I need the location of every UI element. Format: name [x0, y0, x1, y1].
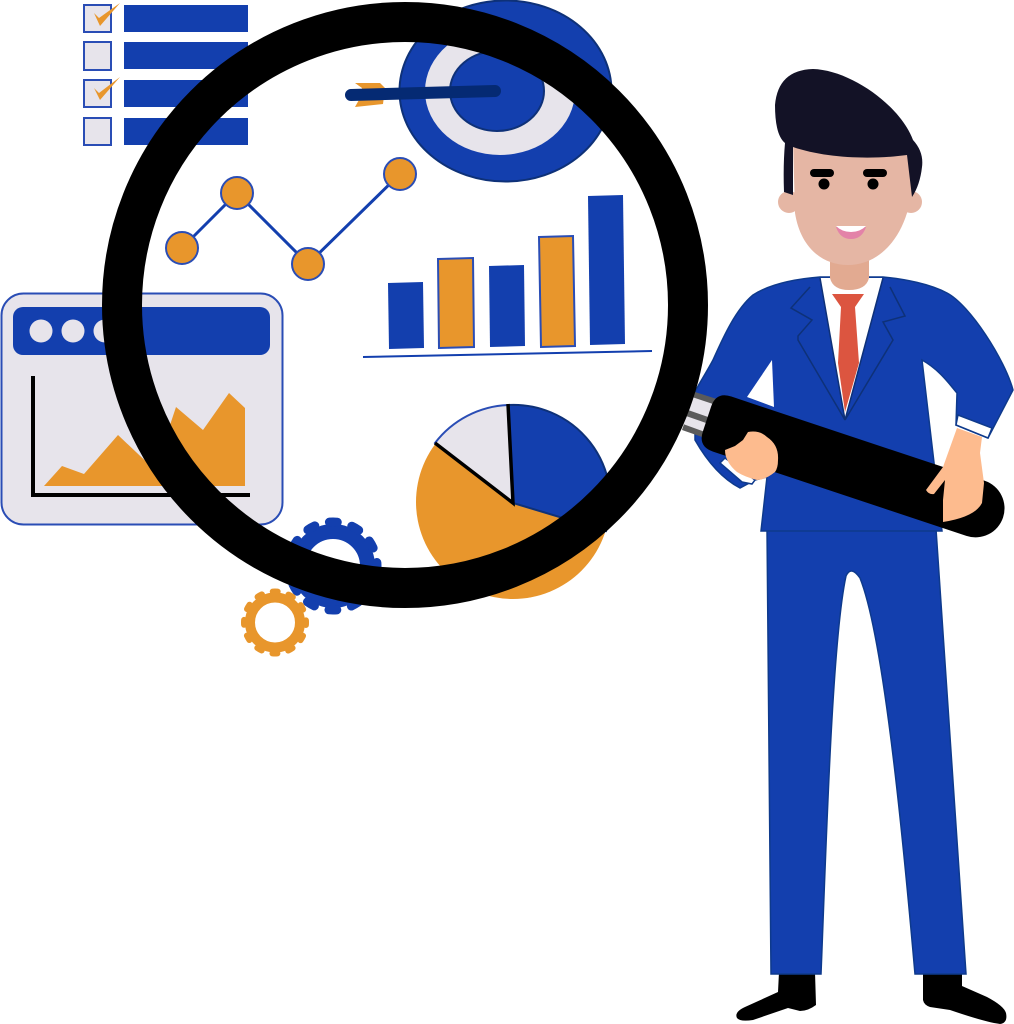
hand at end of handle [926, 428, 984, 522]
necktie [832, 294, 864, 412]
panel: browser window with area chart [2, 294, 282, 524]
person [695, 69, 1013, 1024]
icon: blue gear [289, 522, 377, 610]
shirt [820, 278, 883, 418]
neck [830, 258, 869, 290]
panel: checklist [84, 3, 248, 145]
bar chart [363, 195, 652, 357]
shoes [736, 972, 1006, 1024]
checklist row 1 [84, 3, 248, 32]
handle [698, 391, 1012, 545]
ears [778, 191, 922, 213]
checklist row 4 [84, 118, 248, 145]
ferrule [682, 392, 720, 438]
icon: orange gear [244, 592, 306, 654]
checklist row 2 [84, 42, 248, 70]
head [793, 140, 914, 265]
left cuff [720, 458, 755, 484]
arm gap [747, 360, 774, 407]
icon: target with arrow [351, 0, 612, 182]
lens ring [122, 22, 688, 588]
eyebrows [810, 169, 887, 177]
mouth [836, 226, 866, 239]
hand on handle [725, 432, 778, 480]
lapels [791, 278, 905, 420]
eyes [818, 178, 878, 190]
magnifying glass [122, 22, 1012, 588]
pie chart [416, 404, 610, 599]
jacket [695, 277, 1013, 531]
right cuff [956, 415, 992, 438]
hair [775, 69, 922, 197]
trousers [767, 529, 966, 974]
checklist row 3 [84, 77, 248, 107]
line chart [166, 158, 416, 280]
